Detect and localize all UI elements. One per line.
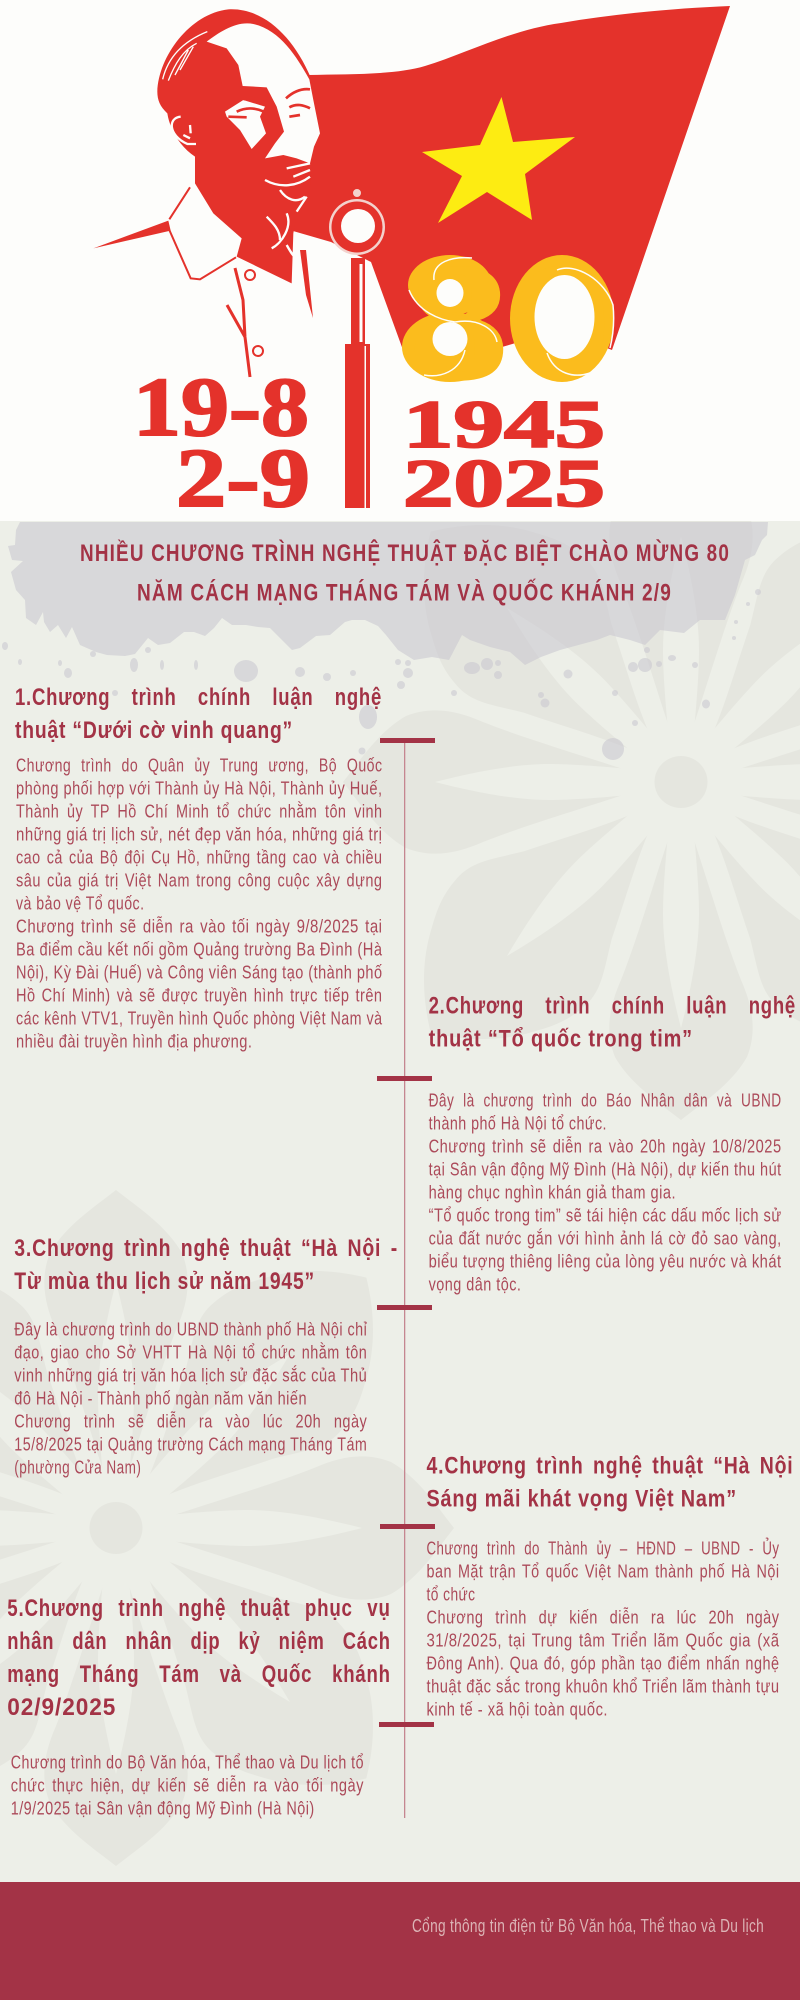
body text 1: Ba điểm cầu kết nối gồm Quảng trường Ba Đình (Hà [16, 939, 383, 959]
microphone [329, 188, 385, 508]
red flag [293, 6, 730, 350]
body text 3: đạo, giao cho Sở VHTT Hà Nội tổ chức nhằm tôn [14, 1341, 367, 1362]
body text 1: nhiều đài truyền hình địa phương. [16, 1031, 252, 1051]
heading 3 [14, 1235, 398, 1295]
body text 5: Chương trình do Bộ Văn hóa, Thể thao và Du lịch tổ [11, 1752, 364, 1772]
heading 1 [15, 684, 382, 744]
title: NĂM CÁCH MẠNG THÁNG TÁM VÀ QUỐC KHÁNH 2/9 [137, 578, 672, 606]
ink splash behind title [2, 522, 768, 760]
body text 3: vinh những giá trị văn hóa lịch sử đặc sắc của Thủ [14, 1364, 367, 1385]
body text 1: và bảo vệ Tổ quốc. [16, 893, 144, 913]
background flower top right [343, 444, 800, 1120]
body text 1: Chương trình do Quân ủy Trung ương, Bộ Quốc [16, 755, 382, 775]
section 3 [14, 1235, 432, 1477]
body text 1: Hồ Chí Minh) và sẽ được truyền hình trực tiếp trên [16, 985, 382, 1005]
body text 5: 1/9/2025 tại Sân vận động Mỹ Đình (Hà Nội) [11, 1798, 315, 1818]
heading 5: mạng Tháng Tám và Quốc khánh [7, 1661, 391, 1688]
hero panel background [0, 0, 800, 521]
timeline marker 1 [380, 738, 435, 743]
body text 1: sâu của giá trị Việt Nam trong công cuộc xây dựng [16, 870, 382, 890]
timeline marker 4 [380, 1524, 435, 1529]
body text 3: Đây là chương trình do UBND thành phố Hà Nội chỉ [14, 1319, 367, 1339]
body text 3: 15/8/2025 tại Quảng trường Cách mạng Tháng Tám [14, 1434, 367, 1454]
section 4 [380, 1452, 794, 1719]
heading 2 [429, 992, 796, 1052]
body text 1: các kênh VTV1, Truyền hình Quốc phòng Việt Nam và [16, 1008, 383, 1028]
heading 5 [7, 1595, 391, 1721]
timeline marker 3 [377, 1305, 432, 1310]
body text 3: (phường Cửa Nam) [14, 1457, 141, 1477]
body text 5 [11, 1752, 364, 1818]
heading 1: 1.Chương trình chính luận nghệ [15, 684, 382, 711]
body text 3: Chương trình sẽ diễn ra vào lúc 20h ngày [14, 1410, 367, 1431]
heading 3: 3.Chương trình nghệ thuật “Hà Nội - [14, 1235, 398, 1262]
body text 3: đô Hà Nội - Thành phố ngàn năm văn hiến [14, 1388, 307, 1408]
date 2-9: 2-9 [176, 432, 310, 525]
timeline marker 2 [377, 1076, 432, 1081]
background flower bottom left [0, 1190, 454, 1866]
heading 3: Từ mùa thu lịch sử năm 1945” [14, 1268, 315, 1295]
body text 1: phòng phối hợp với Thành ủy Hà Nội, Thành ủy Huế, [16, 778, 382, 798]
heading 4 [426, 1452, 794, 1513]
body text 1: Nội), Kỳ Đài (Huế) và Công viên Sáng tạo (thành phố [16, 962, 382, 982]
body text 2 [429, 1091, 782, 1295]
body text 3 [14, 1319, 367, 1477]
body text 4: tổ chức [426, 1584, 476, 1604]
body text 1: Thành ủy TP Hồ Chí Minh tổ chức nhằm tôn vinh [16, 800, 382, 821]
body text 2: hàng chục nghìn khán giả tham gia. [429, 1183, 676, 1203]
section 2 [377, 992, 796, 1295]
body text 4: kinh tế - xã hội toàn quốc. [426, 1699, 608, 1719]
body text 2: thành phố Hà Nội tổ chức. [429, 1114, 607, 1134]
body text 5: chức thực hiện, dự kiến sẽ diễn ra vào tối ngày [11, 1774, 364, 1795]
title [80, 539, 730, 606]
heading 5: 02/9/2025 [7, 1694, 116, 1721]
section 1 [15, 684, 435, 1051]
section 5 [7, 1595, 434, 1818]
body text 1 [16, 755, 383, 1051]
jacket details [227, 250, 313, 377]
number 80: 80 [408, 228, 612, 416]
timeline marker 5 [379, 1722, 434, 1727]
heading 4: Sáng mãi khát vọng Việt Nam” [426, 1486, 737, 1513]
heading 1: thuật “Dưới cờ vinh quang” [15, 717, 293, 744]
timeline axis [404, 743, 405, 1818]
body text 1: cao cả của Bộ đội Cụ Hồ, những tầng cao và chiều [16, 847, 382, 867]
body text 1: Chương trình sẽ diễn ra vào tối ngày 9/8/2025 tại [16, 915, 382, 936]
date 19-8: 19-8 [133, 361, 309, 454]
heading 5: 5.Chương trình nghệ thuật phục vụ [7, 1595, 391, 1622]
heading 2: thuật “Tổ quốc trong tim” [429, 1026, 693, 1052]
heading 5: nhân dân nhân dịp kỷ niệm Cách [7, 1628, 391, 1655]
body text 1: những giá trị lịch sử, nét đẹp văn hóa, những giá trị [16, 824, 382, 844]
footer band [0, 1882, 800, 2000]
portrait of President Ho Chi Minh [93, 9, 321, 283]
year 2025: 2025 [403, 445, 605, 521]
year 1945: 1945 [403, 386, 605, 462]
hero emblem [93, 6, 730, 525]
yellow star [422, 97, 575, 223]
body text 4 [426, 1537, 780, 1719]
body text 2: vọng dân tộc. [429, 1275, 521, 1295]
